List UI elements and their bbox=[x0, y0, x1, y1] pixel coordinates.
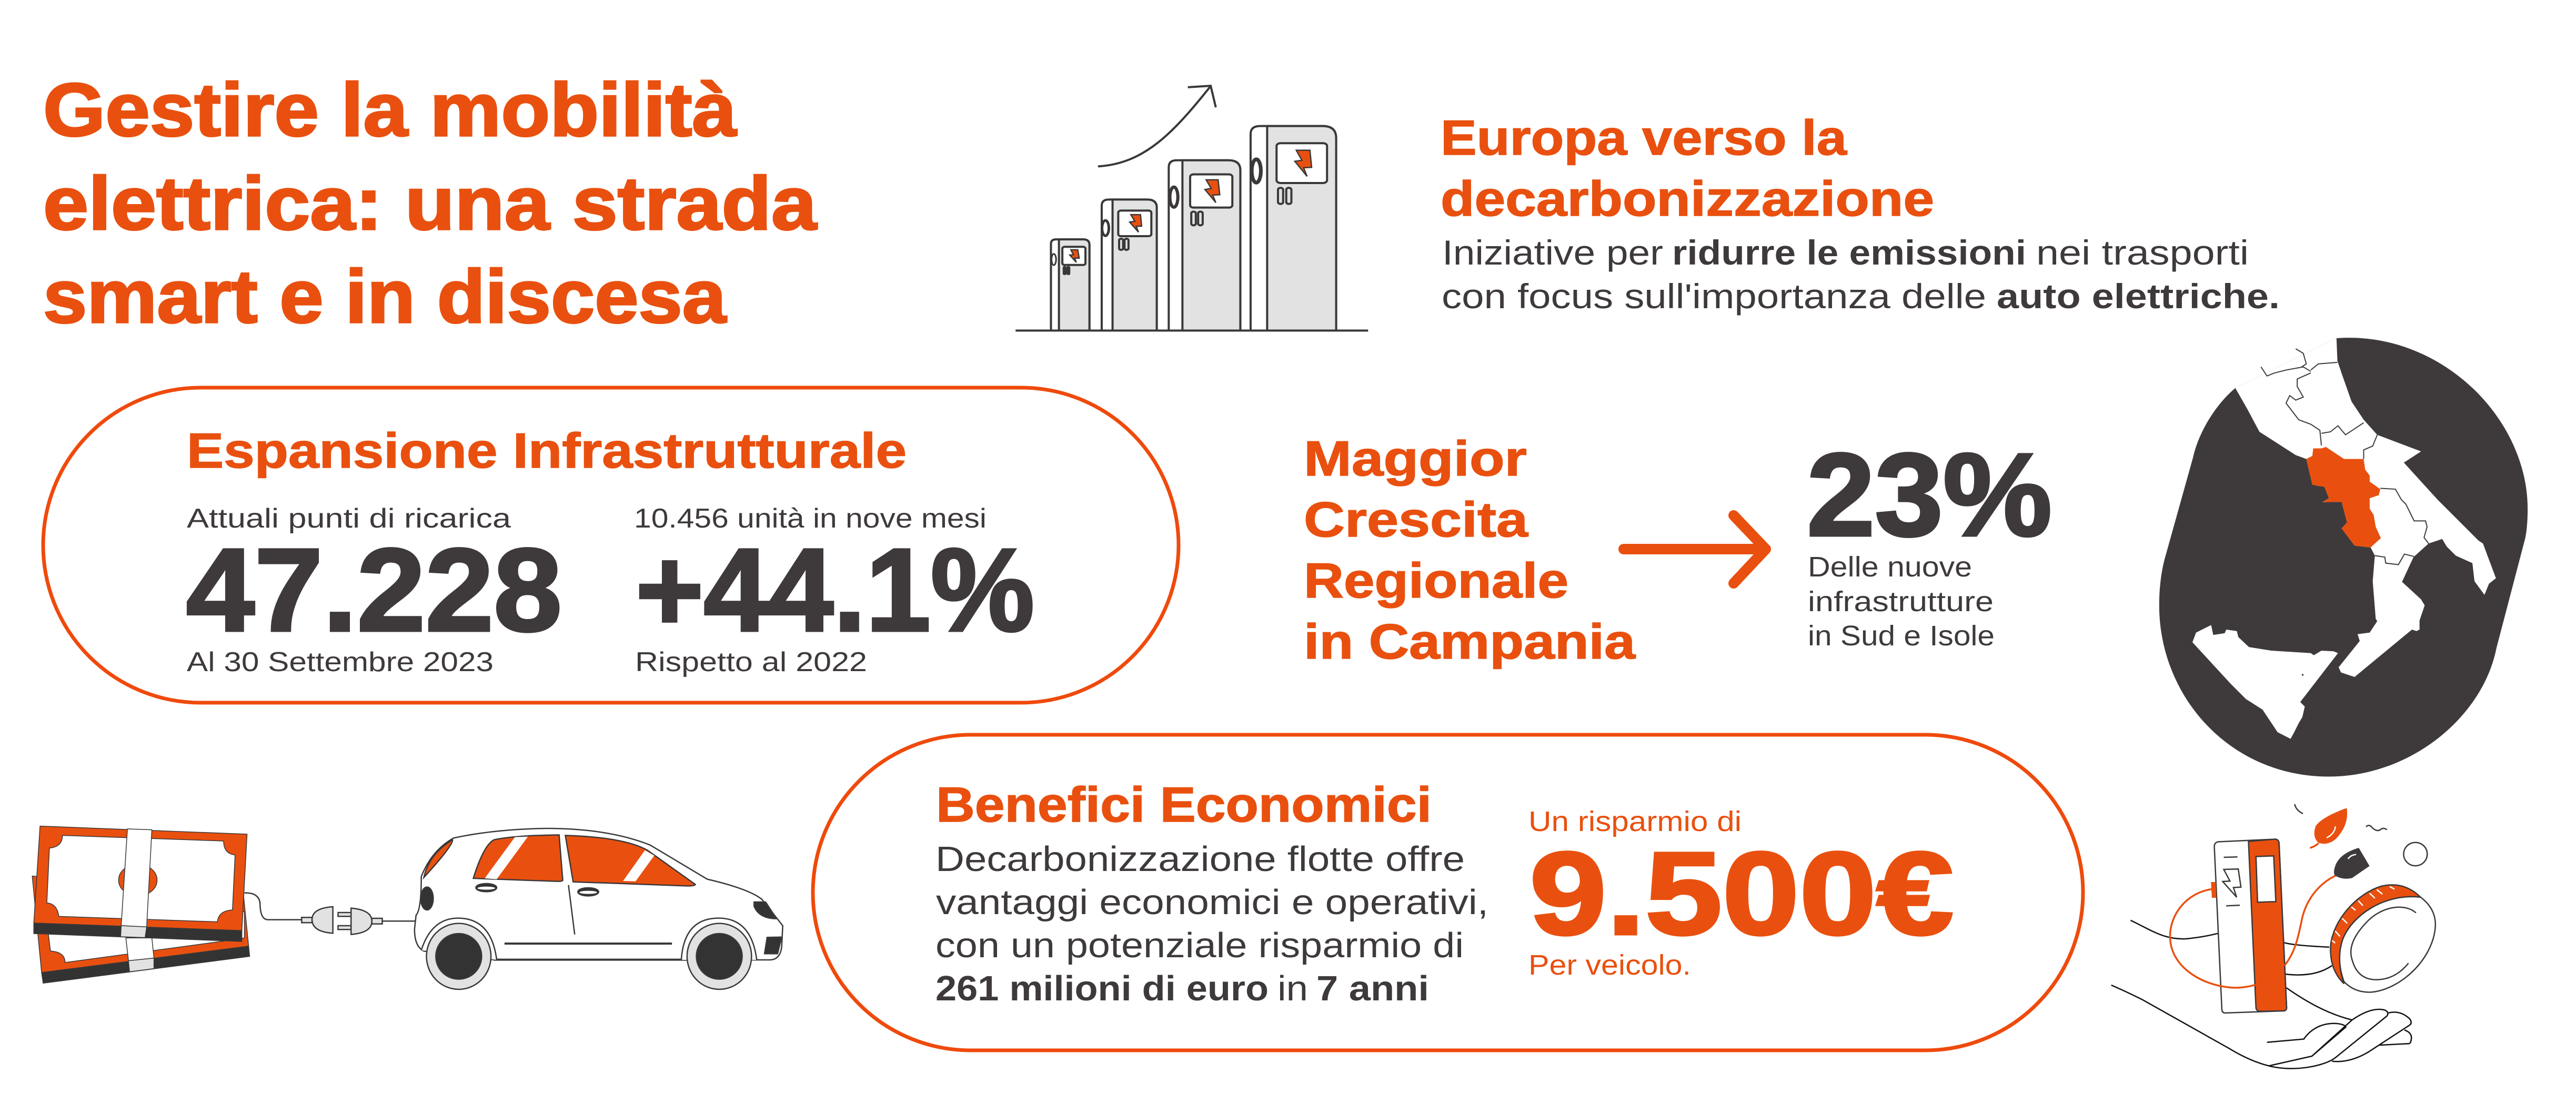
arm lines bbox=[2130, 920, 2352, 1020]
front banknote bbox=[34, 826, 247, 941]
plug and cable bbox=[245, 893, 416, 935]
panel: Espansione Infrastrutturale bbox=[43, 388, 1179, 703]
text: initiatives: nei trasporti bbox=[2036, 233, 2249, 272]
stat: saving per vehicle bbox=[1528, 806, 1954, 981]
body text: vantaggi economici e operativi, bbox=[936, 883, 1488, 922]
stat: charging points: Attuali punti di ricarica bbox=[187, 503, 511, 534]
heading: Europa verso la decarbonizzazione: Europa verso la bbox=[1441, 110, 1847, 165]
stat description: in Sud e Isole bbox=[1808, 620, 1995, 652]
heading: Maggior Crescita Regionale in Campania: Regionale bbox=[1304, 553, 1568, 608]
heading: Maggior Crescita Regionale in Campania: Crescita bbox=[1304, 492, 1528, 547]
text: initiatives: auto elettriche. bbox=[1997, 277, 2280, 316]
charger 3 bbox=[1169, 160, 1240, 331]
heading: Maggior Crescita Regionale in Campania: in Campania bbox=[1304, 614, 1636, 669]
stat: 23% bbox=[1807, 429, 2052, 652]
growth arrow bbox=[1099, 86, 1216, 166]
stat: saving per vehicle: Per veicolo. bbox=[1528, 949, 1691, 981]
body text: in bbox=[1277, 969, 1308, 1008]
dark sea blob bbox=[2159, 338, 2528, 776]
panel: Benefici Economici bbox=[813, 735, 2083, 1050]
heading: Maggior Crescita Regionale in Campania bbox=[1304, 431, 1636, 669]
text: initiatives: ridurre le emissioni bbox=[1672, 233, 2026, 272]
back banknote bbox=[32, 876, 249, 983]
heading: Europa verso la decarbonizzazione bbox=[1441, 110, 1934, 226]
pill outline bbox=[813, 735, 2083, 1050]
small dot bbox=[2302, 674, 2303, 676]
ground line bbox=[1015, 330, 1368, 332]
stat: saving per vehicle: Un risparmio di bbox=[1528, 806, 1742, 837]
body text: 7 anni bbox=[1316, 969, 1429, 1008]
Campania bbox=[2306, 447, 2381, 548]
title bbox=[43, 68, 818, 339]
stat: growth: 10.456 unità in nove mesi bbox=[634, 503, 987, 534]
icon: banknotes plugged into car bbox=[32, 826, 783, 989]
small marks bbox=[2295, 804, 2427, 866]
orange cable bbox=[2170, 875, 2336, 988]
body text: con un potenziale risparmio di bbox=[935, 926, 1464, 965]
charger 1 bbox=[1051, 239, 1090, 331]
panel heading: Benefici Economici bbox=[936, 777, 1432, 832]
icon: growing charging stations bbox=[1015, 86, 1368, 331]
body text bbox=[935, 839, 1488, 1008]
heading: Europa verso la decarbonizzazione: decarbonizzazione bbox=[1441, 171, 1934, 226]
stat: 23%: 23% bbox=[1807, 429, 2052, 561]
Sicily bbox=[2192, 625, 2338, 739]
text: initiatives bbox=[1442, 233, 2280, 316]
text: initiatives: Iniziative per bbox=[1442, 233, 1663, 272]
leaf bbox=[2310, 808, 2347, 848]
stat: charging points: 47.228 bbox=[186, 524, 562, 656]
peninsula bbox=[2235, 338, 2496, 677]
map: southern Italy with Campania highlighted bbox=[2159, 338, 2528, 776]
arrow bbox=[1624, 515, 1766, 583]
car bbox=[415, 828, 783, 989]
charger 4 bbox=[1251, 126, 1336, 331]
body text: Decarbonizzazione flotte offre bbox=[935, 839, 1465, 879]
title: Gestire la mobilità bbox=[43, 68, 737, 152]
hand bbox=[2111, 985, 2411, 1069]
cap bbox=[2334, 848, 2370, 879]
stat description: infrastrutture bbox=[1808, 586, 1994, 617]
coin bbox=[2330, 885, 2436, 992]
stat: charging points: Al 30 Settembre 2023 bbox=[187, 647, 494, 677]
pill outline bbox=[43, 388, 1179, 703]
panel heading: Espansione Infrastrutturale bbox=[187, 423, 907, 478]
stat description bbox=[1808, 551, 1995, 652]
body text: 261 milioni di euro bbox=[935, 969, 1269, 1008]
card bbox=[2212, 839, 2287, 1013]
stat: growth: Rispetto al 2022 bbox=[635, 647, 867, 677]
title: smart e in discesa bbox=[43, 255, 727, 339]
stat: saving per vehicle: 9.500€ bbox=[1530, 828, 1954, 959]
stat: growth: +44.1% bbox=[636, 524, 1034, 656]
region borders bbox=[2261, 349, 2429, 565]
text: initiatives: con focus sull'importanza delle bbox=[1442, 277, 1986, 316]
charger 2 bbox=[1102, 199, 1157, 331]
heading: Maggior Crescita Regionale in Campania: Maggior bbox=[1304, 431, 1527, 486]
stat description: Delle nuove bbox=[1808, 551, 1972, 583]
title: elettrica: una strada bbox=[43, 162, 818, 246]
icon: hand with card, coin and leaf bbox=[2111, 804, 2436, 1069]
